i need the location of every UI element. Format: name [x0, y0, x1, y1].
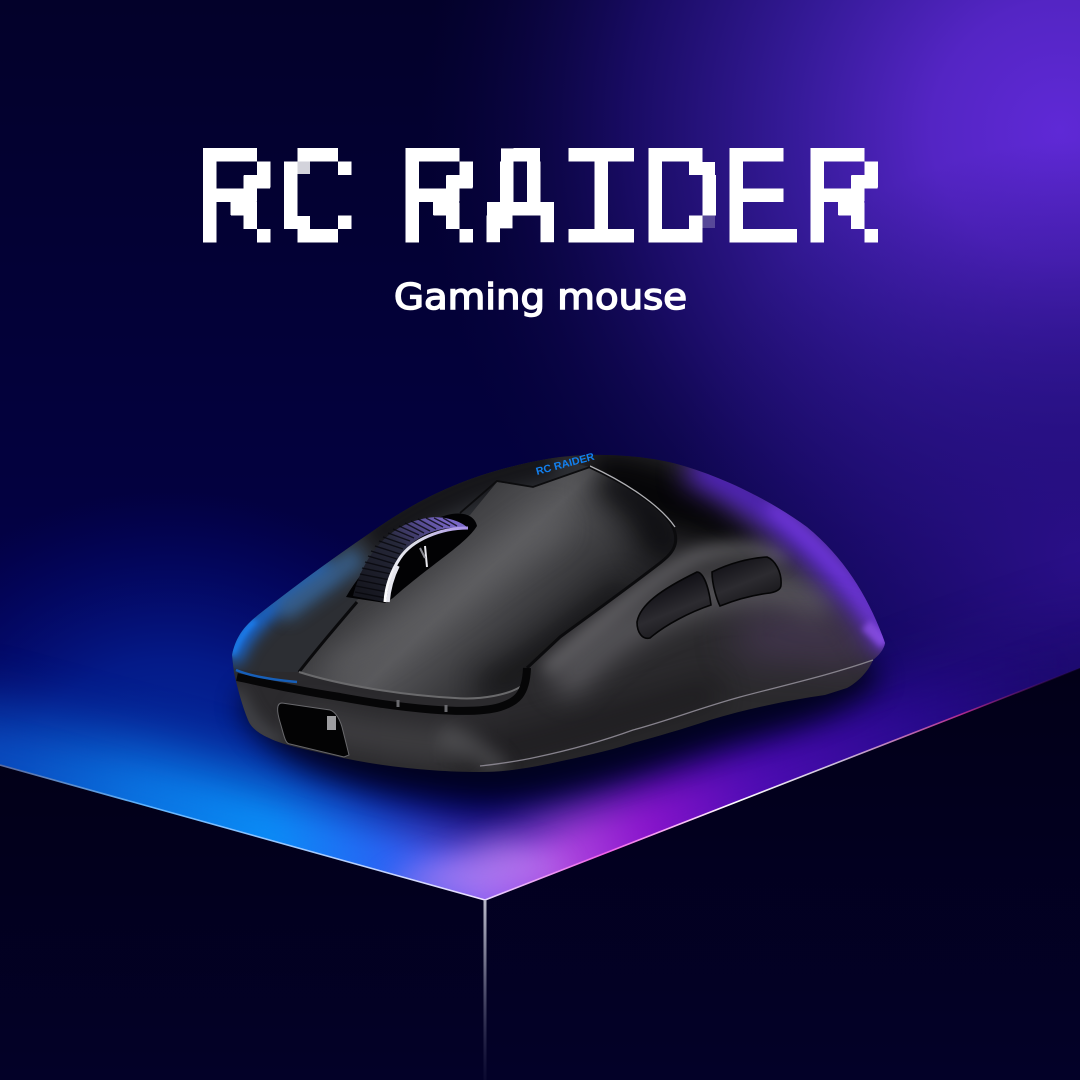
platform top surface glow [0, 656, 1008, 900]
black gap under shell [236, 668, 527, 712]
mouse body [232, 454, 885, 772]
mouse shadow [240, 650, 880, 800]
mouse logo: RC RAIDER [535, 451, 596, 478]
scroll wheel slot [346, 513, 477, 603]
main button panel [299, 467, 676, 698]
panel seam lines [299, 466, 676, 698]
usb port [278, 703, 349, 757]
gaming mouse product [220, 440, 900, 780]
scroll wheel [353, 517, 468, 602]
left button shell [232, 458, 590, 672]
platform cube faces [0, 668, 1080, 1080]
subtitle: Gaming mouse [394, 277, 687, 318]
rim line [480, 660, 873, 766]
side button front [712, 557, 781, 606]
side button rear [637, 572, 711, 638]
